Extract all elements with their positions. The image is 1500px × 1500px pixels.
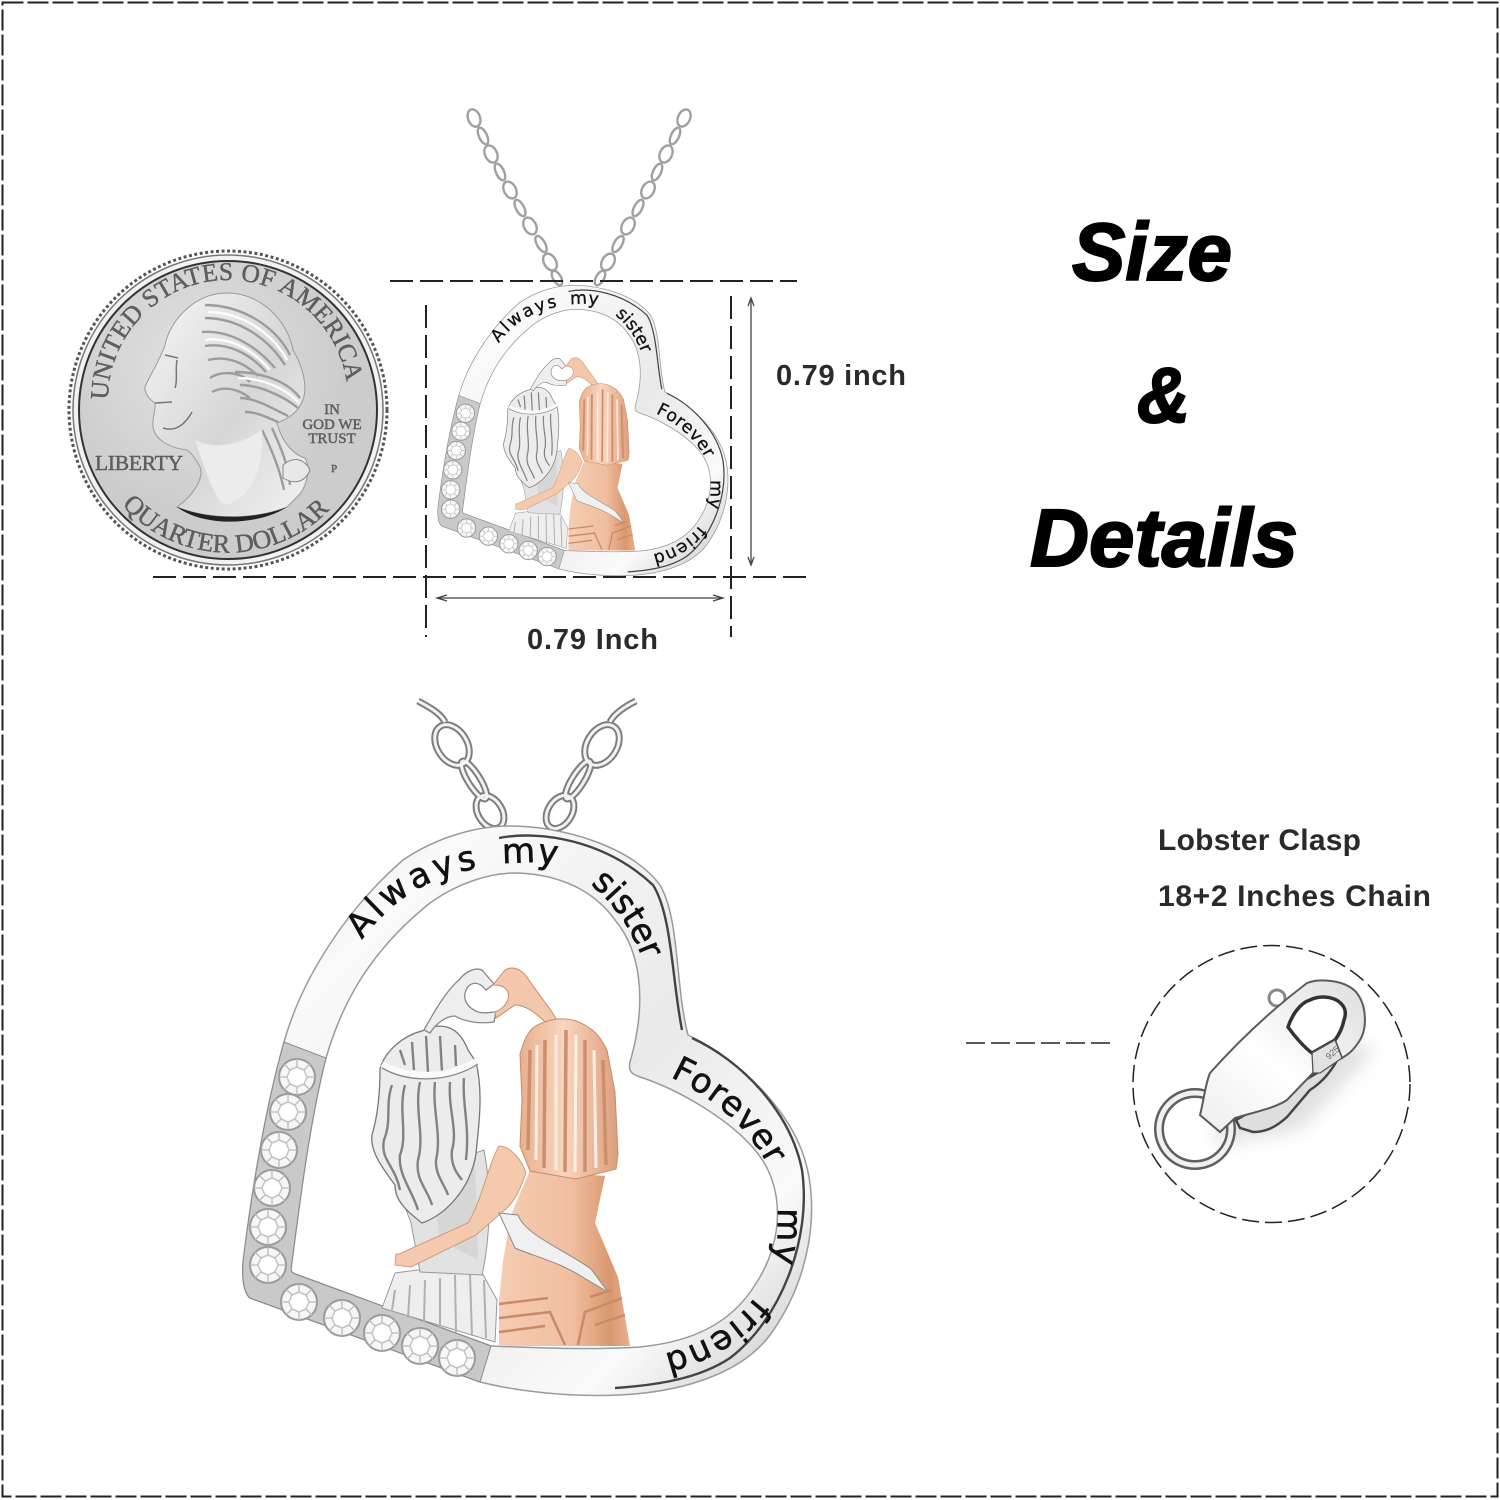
arrow: height — [748, 298, 754, 565]
figures: two girls making a heart — [372, 968, 630, 1346]
height label: 0.79 inch — [776, 360, 906, 392]
coin lettering: QUARTER DOLLAR — [125, 496, 330, 553]
engraved text: right: my — [768, 1210, 798, 1266]
engraved text: top — [348, 843, 661, 954]
clasp detail circle — [1133, 946, 1410, 1222]
small heart pendant: Forever — [657, 402, 714, 455]
small heart pendant: my — [706, 482, 720, 510]
small heart pendant: sister — [616, 309, 651, 351]
portrait — [145, 293, 310, 522]
title: Size & Details: Size — [1072, 207, 1232, 298]
large necklace chain — [418, 701, 636, 834]
coin lettering: IN — [324, 402, 340, 418]
small necklace chain — [465, 107, 693, 287]
large heart pendant — [242, 825, 812, 1396]
engraved text: top: Always — [348, 850, 475, 940]
heart band with stones — [243, 826, 812, 1395]
clasp leader line — [966, 1042, 1112, 1044]
small heart pendant: Always — [492, 298, 556, 344]
icon: lobster clasp: 925 — [1324, 1044, 1342, 1061]
title: Size & Details — [1030, 207, 1298, 584]
coin lettering: GOD WE — [302, 417, 362, 433]
title: Size & Details: Details — [1030, 493, 1298, 584]
small heart pendant — [437, 284, 728, 576]
clasp label — [1158, 824, 1431, 913]
engraved text: right: Forever — [672, 1056, 785, 1159]
icon: lobster clasp — [1159, 980, 1375, 1165]
engraved text: right: friend — [666, 1300, 771, 1378]
coin lettering: P — [331, 463, 337, 475]
coin lettering: TRUST — [308, 431, 356, 447]
arrow: width — [437, 595, 723, 601]
small heart pendant: my — [571, 294, 599, 308]
engraved text: top: sister — [592, 873, 661, 954]
coin lettering: UNITED STATES OF AMERICA — [90, 262, 362, 398]
small heart pendant: friend — [654, 526, 708, 567]
clasp label: 18+2 Inches Chain — [1158, 880, 1431, 913]
width label: 0.79 Inch — [527, 624, 658, 656]
measure guide lines — [153, 281, 811, 637]
coin: quarter dollar — [68, 250, 388, 570]
coin lettering — [90, 262, 362, 553]
title: Size & Details: & — [1137, 351, 1190, 439]
engraved text: right — [666, 1056, 798, 1378]
clasp label: Lobster Clasp — [1158, 824, 1361, 857]
coin lettering: LIBERTY — [95, 451, 183, 475]
engraved text: top: my — [504, 843, 558, 870]
